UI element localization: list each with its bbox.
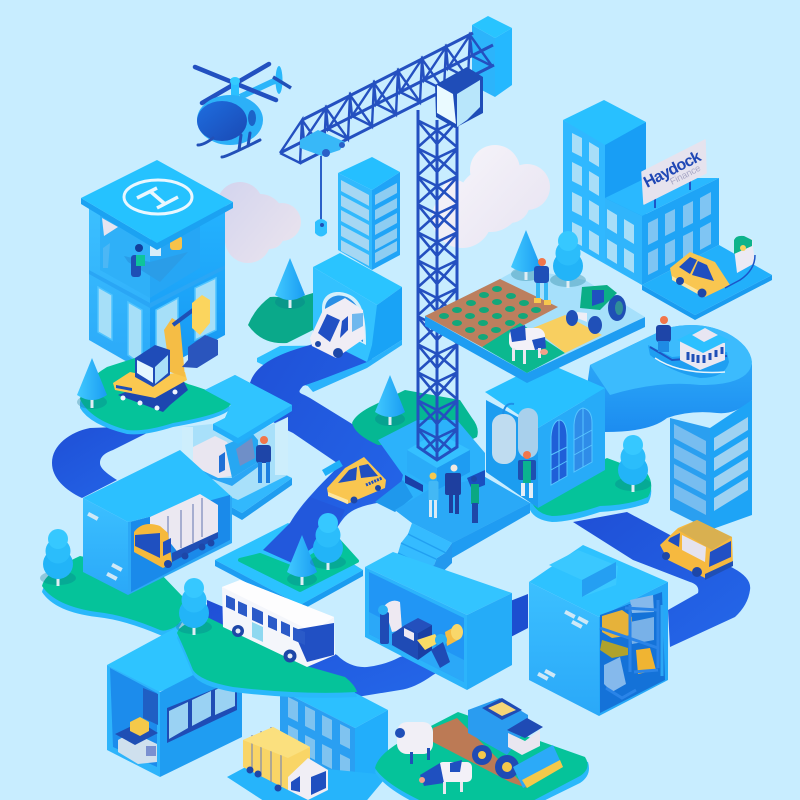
machine — [193, 433, 258, 486]
sailor — [656, 316, 671, 352]
crane trolley and hook — [300, 130, 345, 236]
paper roll — [384, 601, 402, 632]
worker with apron — [518, 451, 536, 498]
sign — [641, 140, 706, 208]
woman — [428, 472, 438, 518]
bucket — [182, 335, 218, 368]
press machine — [378, 601, 463, 668]
tunnel building — [307, 253, 402, 392]
sign: Finance — [668, 163, 703, 188]
right tree island — [530, 458, 651, 522]
roof helipad — [81, 160, 233, 250]
bus — [222, 580, 335, 667]
harvester — [468, 698, 563, 788]
road: tunnel to taxi — [249, 318, 405, 563]
shelf contents — [600, 595, 662, 698]
upper glass floor interior — [100, 215, 200, 298]
kiosk — [180, 375, 292, 520]
boat — [648, 316, 729, 378]
lower road — [207, 600, 450, 697]
service platform — [642, 275, 772, 320]
taxi on road — [322, 457, 386, 504]
sign: Haydock — [641, 148, 704, 192]
cabin — [680, 340, 725, 370]
sheep — [395, 722, 433, 764]
excavator — [113, 295, 218, 412]
right striped tower — [670, 400, 752, 530]
truck in warehouse — [134, 494, 218, 568]
tracks — [118, 376, 188, 412]
skids — [198, 133, 260, 157]
storage box — [529, 545, 668, 716]
road between boxes — [505, 594, 528, 640]
yellow van — [660, 520, 733, 580]
van in tunnel — [310, 298, 365, 358]
tree: cone on platform — [287, 535, 317, 586]
tree: cone by tunnel — [275, 258, 305, 309]
farm platform — [425, 268, 645, 383]
windows — [572, 133, 634, 273]
Haydock Finance building — [563, 100, 772, 320]
helicopter — [195, 64, 291, 157]
tractor — [566, 285, 626, 334]
press machine box — [365, 552, 512, 690]
rotor — [195, 64, 276, 103]
stairs — [390, 523, 452, 582]
helipad office building — [81, 160, 233, 375]
taxi — [670, 252, 730, 298]
crane counterweight — [472, 16, 512, 97]
truck warehouse — [83, 450, 232, 595]
roof — [205, 375, 292, 444]
ball tree left — [40, 529, 76, 586]
yellow web — [417, 634, 440, 650]
conveyor with parcel — [115, 688, 158, 764]
tanks — [492, 404, 538, 464]
charging station — [725, 236, 755, 288]
right road — [573, 512, 750, 647]
plinth — [407, 432, 470, 468]
people in plaza — [428, 451, 536, 523]
bottom truck — [243, 727, 328, 800]
person in green — [471, 476, 479, 523]
crops — [439, 286, 541, 340]
farm plots — [425, 279, 602, 373]
left road loop — [52, 425, 173, 498]
tree: cone on farm — [511, 230, 541, 281]
arm — [164, 318, 185, 377]
farmer — [534, 258, 551, 305]
bottom farm island — [375, 712, 589, 800]
cow on farm — [509, 325, 548, 364]
bus windows — [226, 595, 305, 645]
ball tree right island — [615, 435, 651, 492]
crane boom — [280, 33, 494, 163]
tree: cone by crane — [375, 375, 405, 426]
warehouse island — [42, 556, 184, 636]
bottom mid building — [280, 672, 388, 795]
ball tree on farm — [550, 231, 586, 288]
crane cab — [435, 67, 483, 128]
cloud right — [432, 145, 550, 248]
tower — [563, 120, 642, 285]
ball tree on platform — [310, 513, 346, 570]
right curved bridge — [585, 325, 752, 432]
crane base island — [352, 390, 478, 445]
cow bottom — [419, 760, 472, 794]
arched windows — [551, 408, 592, 485]
crane tower — [417, 110, 458, 460]
cloud left — [210, 182, 301, 263]
road end in platform notch — [263, 497, 345, 563]
platform with trees — [215, 523, 363, 611]
ball tree by bus — [176, 578, 212, 635]
low block — [642, 178, 719, 285]
tunnel floor slab — [257, 345, 370, 386]
bus island — [177, 617, 357, 698]
tree: cone by excavator — [77, 358, 107, 409]
excavator island — [80, 358, 231, 434]
tree island by tunnel — [248, 293, 313, 343]
tank building — [485, 362, 605, 508]
body — [113, 372, 187, 398]
center plaza — [375, 420, 530, 558]
ground floor windows — [98, 278, 216, 365]
striped tower on tunnel — [338, 157, 400, 270]
man in suit — [445, 464, 461, 514]
press body — [405, 618, 432, 633]
bottom truck platform — [227, 762, 388, 800]
take-up roller — [445, 625, 458, 646]
bottom left box — [107, 627, 242, 777]
fuselage — [197, 95, 263, 145]
cab — [135, 345, 170, 387]
operator — [256, 436, 271, 483]
